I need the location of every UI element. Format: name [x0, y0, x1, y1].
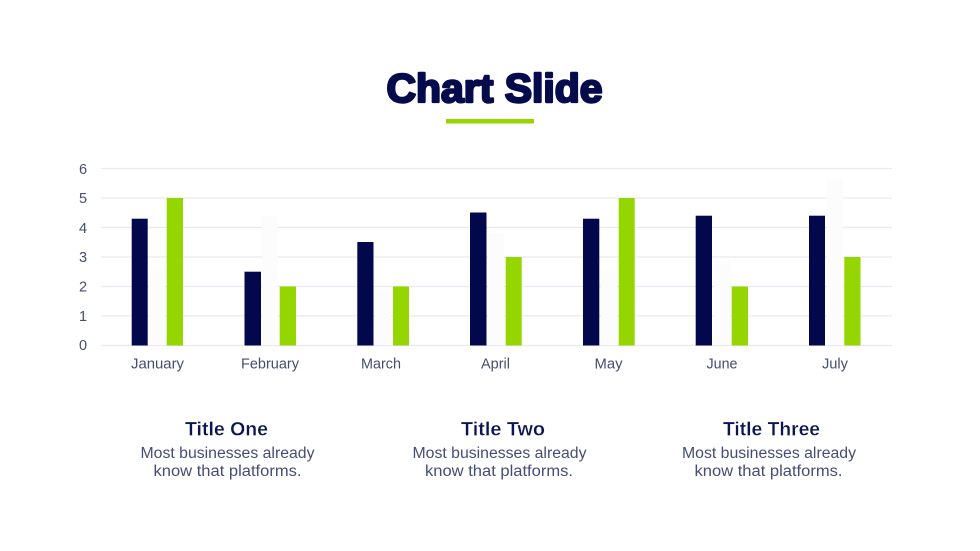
x axis labels: March: [361, 356, 401, 372]
y axis labels: [79, 162, 87, 354]
text block: title three: know that platforms.: [694, 463, 842, 480]
y axis labels: 6: [79, 162, 87, 178]
x axis labels: May: [594, 356, 623, 372]
y axis labels: 2: [79, 280, 87, 296]
text block: title three: Title Three: [723, 418, 820, 440]
text block: title two: know that platforms.: [425, 463, 573, 480]
text block: title one: [140, 418, 315, 480]
x axis labels: July: [822, 356, 849, 372]
y axis labels: 1: [79, 309, 87, 325]
y axis labels: 0: [79, 338, 87, 354]
x axis labels: June: [706, 356, 738, 372]
green series bars: [167, 198, 860, 346]
title underline: [446, 119, 534, 124]
y axis labels: 4: [79, 221, 87, 237]
navy series bars: [132, 212, 825, 346]
text block: title one: Most businesses already: [140, 445, 315, 462]
y axis labels: 3: [79, 250, 87, 266]
near-white series bars: [149, 179, 843, 345]
y axis labels: 5: [79, 191, 87, 207]
x axis labels: January: [131, 356, 185, 372]
bar chart: [79, 162, 892, 372]
x axis labels: February: [241, 356, 300, 372]
text block: title two: Title Two: [461, 418, 545, 440]
text block: title two: Most businesses already: [412, 445, 587, 462]
title: Chart Slide: [386, 67, 602, 111]
x axis labels: [131, 356, 849, 372]
text block: title one: Title One: [185, 418, 268, 440]
text block: title one: know that platforms.: [154, 463, 302, 480]
text block: title two: [412, 418, 587, 480]
x axis labels: April: [481, 356, 510, 372]
text block: title three: Most businesses already: [682, 445, 856, 462]
text block: title three: [682, 418, 856, 480]
